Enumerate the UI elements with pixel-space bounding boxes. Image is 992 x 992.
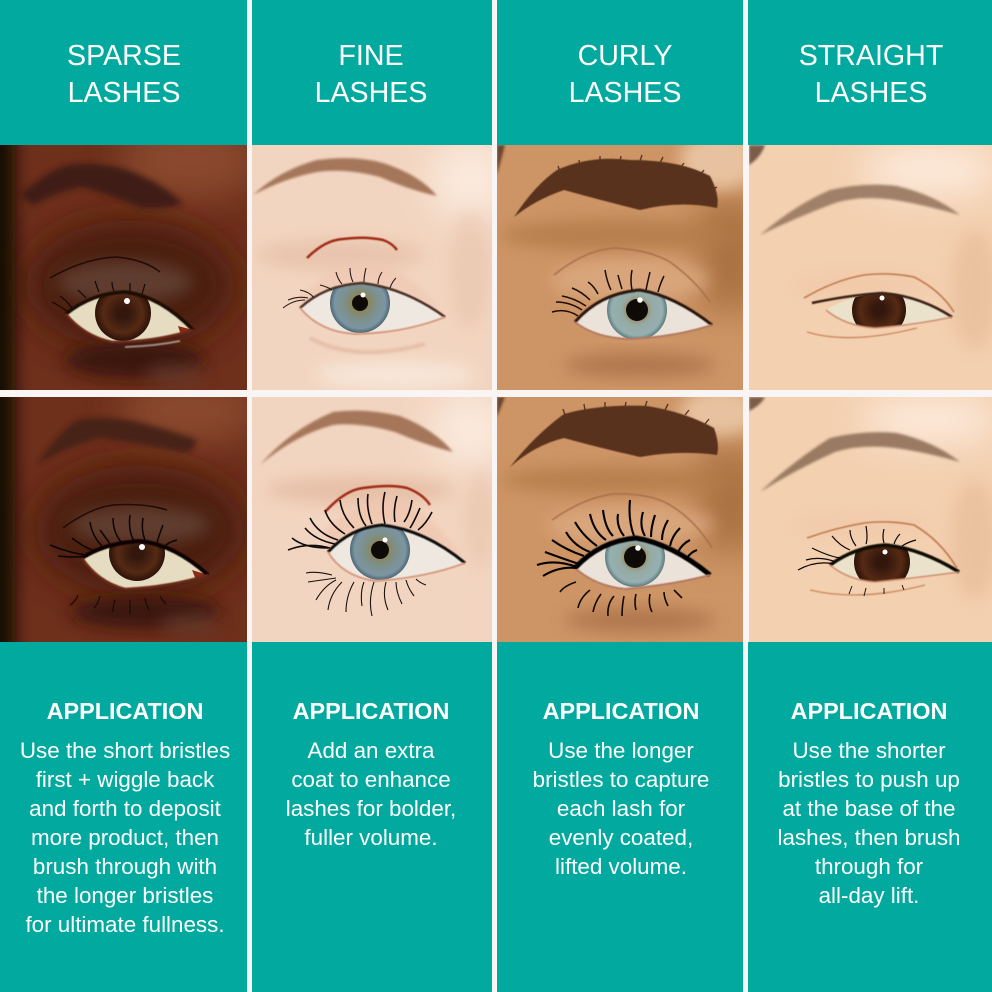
eyeball	[82, 543, 205, 588]
application text: sparse: for ultimate fullness.	[25, 912, 225, 937]
header band: fine	[252, 0, 492, 145]
heading: curly lashes	[569, 40, 681, 109]
application text: curly: APPLICATION	[543, 698, 699, 724]
application text: straight: bristles to push up	[778, 767, 960, 792]
application text: straight: Use the shorter	[792, 738, 946, 763]
application text: straight: lashes, then brush	[778, 825, 960, 850]
photo: sparse lashes, after	[0, 397, 247, 642]
application text: curly: evenly coated,	[549, 825, 693, 850]
application text: fine: APPLICATION	[293, 698, 449, 724]
heading: sparse lashes: LASHES	[68, 77, 180, 109]
application text: sparse: first + wiggle back	[36, 767, 214, 792]
eyeball	[826, 294, 949, 328]
eyeball	[66, 294, 193, 342]
heading: fine lashes: FINE	[338, 40, 404, 72]
application text: straight: APPLICATION	[791, 698, 947, 724]
application text: straight	[778, 698, 960, 908]
application text: straight: all-day lift.	[819, 883, 919, 908]
application text: straight: at the base of the	[782, 796, 956, 821]
heading: fine lashes: LASHES	[315, 77, 427, 109]
application text: sparse: the longer bristles	[37, 883, 213, 908]
application text: fine: lashes for bolder,	[286, 796, 456, 821]
photo: curly lashes, after	[497, 388, 760, 642]
eyeball	[330, 526, 462, 580]
text panel: fine	[252, 642, 492, 992]
header band: straight	[748, 0, 992, 145]
application text: curly: bristles to capture	[533, 767, 709, 792]
application text: fine: Add an extra	[308, 738, 434, 763]
text panel: curly	[497, 642, 743, 992]
application text: curly: each lash for	[557, 796, 685, 821]
photo: fine lashes, before	[252, 140, 510, 390]
heading: sparse lashes: SPARSE	[67, 40, 181, 72]
photo: straight lashes, before	[749, 144, 992, 390]
eyeball	[832, 546, 955, 582]
application text: fine: fuller volume.	[304, 825, 438, 850]
application text: curly	[533, 698, 709, 879]
text panel: sparse	[0, 642, 247, 992]
application text: fine: coat to enhance	[291, 767, 451, 792]
heading: curly lashes: CURLY	[578, 40, 672, 72]
application text: curly: Use the longer	[548, 738, 694, 763]
heading: straight lashes: LASHES	[815, 77, 927, 109]
application text: sparse: Use the short bristles	[20, 738, 230, 763]
application text: straight: through for	[815, 854, 923, 879]
application text: sparse: APPLICATION	[47, 698, 203, 724]
application text: sparse: brush through with	[33, 854, 217, 879]
photo: sparse lashes, before	[0, 145, 247, 390]
heading: straight lashes: STRAIGHT	[799, 40, 943, 72]
eyeball	[577, 540, 706, 589]
photo: fine lashes, after	[252, 394, 510, 642]
eyeball	[302, 284, 442, 334]
application text: sparse	[20, 698, 230, 937]
application text: curly: lifted volume.	[555, 854, 687, 879]
heading: fine lashes	[315, 40, 427, 109]
header band: sparse	[0, 0, 247, 145]
header band: curly	[497, 0, 743, 145]
photo: curly lashes, before	[497, 145, 743, 390]
application text: sparse: more product, then	[31, 825, 219, 850]
heading: curly lashes: LASHES	[569, 77, 681, 109]
application text: fine	[286, 698, 456, 850]
heading: sparse lashes	[67, 40, 181, 109]
photo: straight lashes, after	[749, 396, 992, 642]
eyeball	[575, 291, 710, 339]
eye photo grid	[0, 145, 992, 642]
heading: straight lashes	[799, 40, 943, 109]
text panel: straight	[748, 642, 992, 992]
application text: sparse: and forth to deposit	[29, 796, 221, 821]
